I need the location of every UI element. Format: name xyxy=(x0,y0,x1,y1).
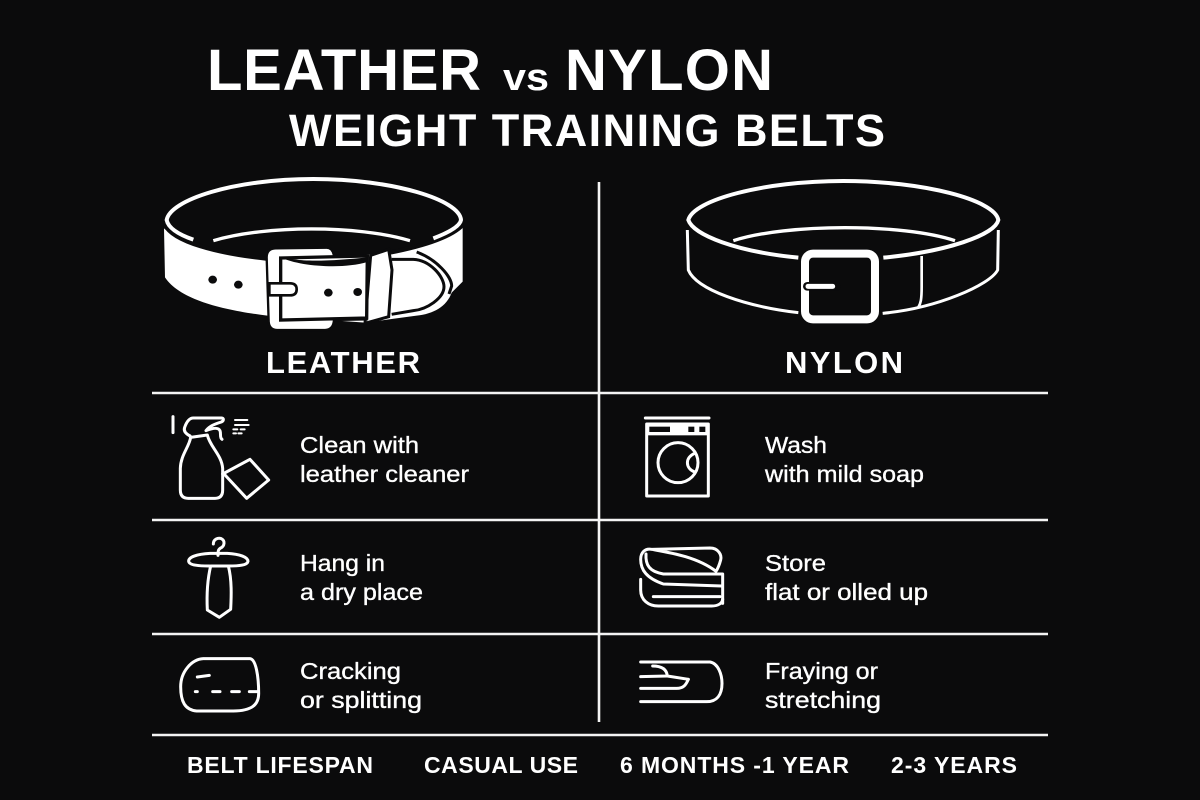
icon: hanger and belt xyxy=(189,538,248,617)
icon: washing machine xyxy=(645,418,709,496)
icon: cracked leather xyxy=(181,659,259,711)
icon: spray bottle and cloth xyxy=(173,417,269,498)
text: hang in a dry place: a dry place xyxy=(300,579,423,605)
icon: folded belt stack xyxy=(641,548,723,606)
heading: nylon: NYLON xyxy=(785,345,903,380)
title: NYLON xyxy=(565,38,773,103)
text: hang in a dry place: Hang in xyxy=(300,550,385,576)
text: wash with mild soap: Wash xyxy=(765,432,827,458)
subtitle: WEIGHT TRAINING BELTS xyxy=(289,105,885,156)
footer row: belt lifespan: 6 MONTHS -1 YEAR xyxy=(620,752,849,778)
text: clean with leather cleaner: leather cleaner xyxy=(300,461,469,487)
text: cracking or splitting: Cracking xyxy=(300,658,401,684)
footer row: belt lifespan: 2-3 YEARS xyxy=(891,752,1017,778)
text: wash with mild soap xyxy=(764,432,924,487)
title: LEATHER xyxy=(207,38,481,103)
heading: leather: LEATHER xyxy=(266,345,420,380)
footer row: belt lifespan: BELT LIFESPAN xyxy=(187,752,373,778)
text: fraying or stretching xyxy=(765,658,881,713)
text: hang in a dry place xyxy=(300,550,423,605)
text: fraying or stretching: Fraying or xyxy=(765,658,878,684)
text: store flat or olled up: Store xyxy=(765,550,826,576)
icon: frayed nylon xyxy=(641,662,722,702)
icon: leather belt xyxy=(164,179,463,330)
text: wash with mild soap: with mild soap xyxy=(764,461,924,487)
text: store flat or olled up xyxy=(765,550,928,605)
icon: nylon belt xyxy=(687,181,998,319)
title: vs xyxy=(503,57,549,99)
footer row: belt lifespan: CASUAL USE xyxy=(424,752,578,778)
text: clean with leather cleaner xyxy=(300,432,469,487)
text: clean with leather cleaner: Clean with xyxy=(300,432,419,458)
text: cracking or splitting xyxy=(300,658,422,713)
text: cracking or splitting: or splitting xyxy=(300,687,422,713)
title xyxy=(207,38,773,103)
text: fraying or stretching: stretching xyxy=(765,687,881,713)
text: store flat or olled up: flat or olled up xyxy=(765,579,928,605)
footer row: belt lifespan xyxy=(187,752,1017,778)
